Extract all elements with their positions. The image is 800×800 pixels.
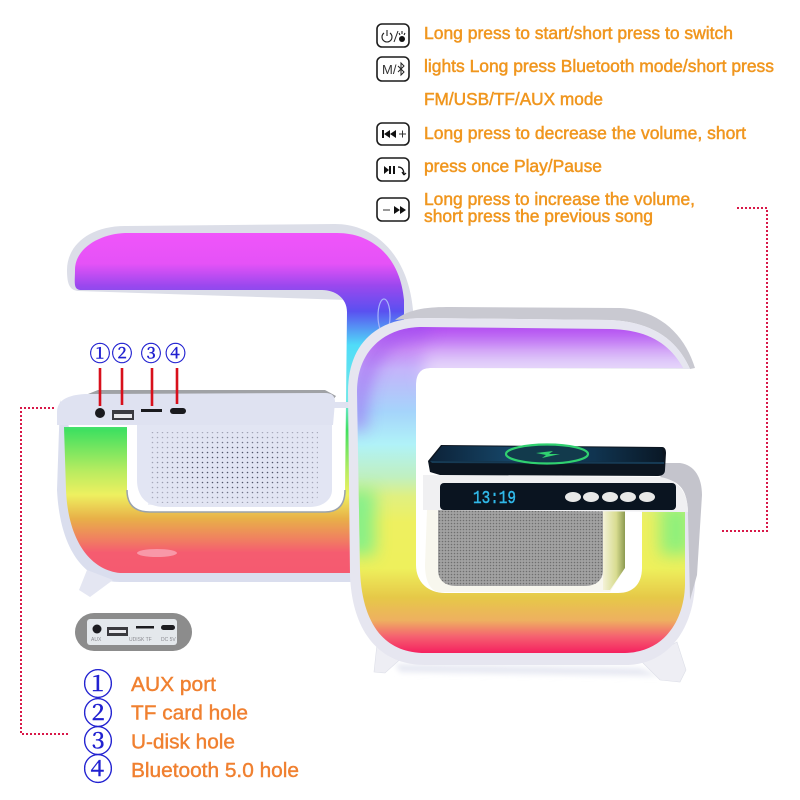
front device glowing light [357, 327, 685, 653]
legend item 3: ③ [83, 717, 113, 761]
rear speaker body [137, 425, 332, 507]
connector stub [333, 402, 353, 408]
left device lower rim [57, 400, 360, 582]
port pointer lines [100, 368, 177, 406]
rear module top strip [88, 390, 336, 400]
legend item 4: Bluetooth 5.0 hole [131, 760, 299, 782]
instruction line 5: press once Play/Pause [424, 156, 602, 176]
AUX jack [95, 408, 105, 418]
speaker cabinet side [603, 510, 625, 590]
USB port [112, 410, 134, 420]
left device glowing light [64, 233, 404, 573]
rear speaker dot fade [148, 430, 320, 505]
front light shading [345, 327, 714, 555]
instruction line 1: Long press to start/short press to switch [424, 23, 733, 43]
left device rim [67, 224, 413, 420]
legend item 2: TF card hole [131, 702, 248, 724]
clock display: 13:19 [473, 489, 516, 509]
legend item 3: U-disk hole [131, 732, 235, 754]
front right foot [642, 642, 686, 682]
speaker cabinet [425, 510, 625, 592]
display panel [440, 483, 676, 510]
port numbers on device: ④ [165, 338, 186, 368]
icon: minus and next button [377, 198, 409, 221]
front module grey side [660, 463, 702, 600]
panel buttons [565, 492, 655, 502]
instruction line 6: Long press to increase the volume, [424, 189, 695, 209]
legend item 1: ① [83, 660, 113, 704]
charging coil mark [378, 299, 390, 333]
legend item 2: ② [83, 689, 113, 733]
port close-up: UDISK TF [129, 637, 152, 643]
speaker grille [438, 510, 603, 586]
rear port module [57, 393, 335, 425]
legend item 1 [83, 660, 216, 704]
legend item 4: ④ [83, 745, 113, 789]
port numbers on device [90, 338, 186, 368]
port numbers on device: ① [90, 338, 110, 368]
instruction line 7: short press the previous song [424, 206, 653, 226]
control module [423, 475, 688, 512]
icon: play and call button [377, 158, 409, 181]
dotted leader: buttons [721, 208, 767, 531]
port close-up: AUX [91, 637, 102, 643]
port legend [83, 660, 299, 789]
instruction line 3: FM/USB/TF/AUX mode [424, 89, 603, 109]
button instructions [377, 23, 774, 226]
legend item 1: AUX port [131, 674, 216, 696]
legend item 2 [83, 689, 248, 733]
left device: rear view [57, 224, 413, 597]
front device rim [348, 318, 698, 665]
front device top surface [395, 307, 695, 369]
TF slot [141, 409, 162, 412]
smartphone on charger [428, 444, 666, 476]
icon: mode and Bluetooth button: M/ [382, 62, 397, 77]
front device: front view [345, 307, 714, 682]
icon: power and light button [377, 24, 409, 47]
left device light highlight [137, 549, 177, 557]
icon: previous and plus button [377, 123, 409, 145]
port numbers on device: ③ [140, 338, 162, 368]
Type-C port [170, 408, 186, 414]
left device foot [79, 570, 113, 597]
shadow under front device [395, 664, 660, 676]
port numbers on device: ② [112, 338, 132, 368]
port close-up: DC 5V [161, 637, 176, 643]
dotted leader: ports [21, 408, 70, 734]
instruction line 4: Long press to decrease the volume, short [424, 123, 746, 143]
front left foot [374, 644, 405, 673]
icon: mode and Bluetooth button [377, 57, 409, 81]
legend item 4 [83, 745, 299, 789]
port close-up [75, 613, 192, 651]
legend item 3 [83, 717, 235, 761]
left device inner edge [127, 490, 345, 512]
rear speaker dots [150, 432, 318, 503]
instruction line 2: lights Long press Bluetooth mode/short press [424, 56, 774, 76]
